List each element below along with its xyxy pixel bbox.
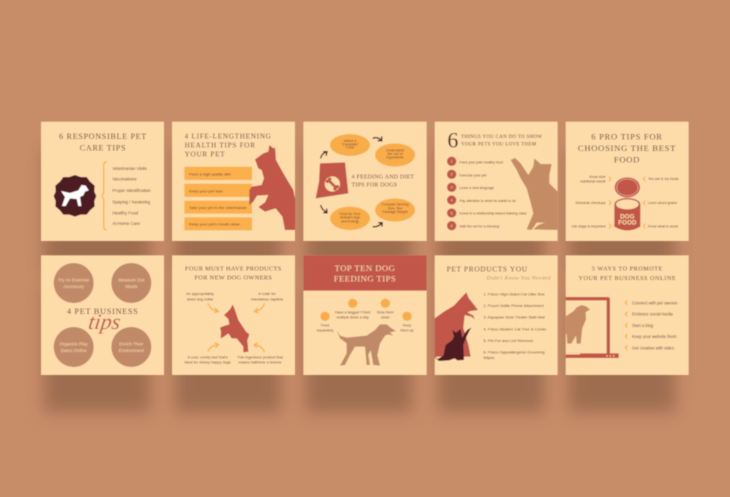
product labels: ideal for chewy happy dogs <box>184 361 231 365</box>
panel: 4 feeding and diet tips <box>303 122 427 241</box>
numbered tips: Have a beggar? Feed <box>335 311 370 315</box>
ellipses with tips: Understand <box>386 149 404 153</box>
product list <box>483 292 547 360</box>
list of care tips: Healthy Food <box>112 210 139 215</box>
panel: pet products you need <box>434 255 558 375</box>
circles with tips: Accessory <box>63 284 85 289</box>
numbered tips <box>317 299 414 333</box>
tip labels: Learn about grains <box>648 201 677 205</box>
big numeral and heading: YOUR PETS YOU LOVE THEM <box>461 142 537 147</box>
list of care tips: Veterinarian Visits <box>112 166 147 171</box>
ellipses with tips: Package Weight <box>382 210 408 214</box>
ellipses with tips: "Complete" <box>341 142 359 146</box>
icon: dog food can: FOOD <box>618 220 637 227</box>
ellipses with tips: Compare Serving <box>381 203 409 207</box>
heading: 5 WAYS TO PROMOTE <box>592 266 663 272</box>
icon: dog food can: DOG <box>620 214 635 221</box>
heading: 4 LIFE-LENGTHENING <box>185 133 272 141</box>
product list: Wipes <box>483 355 494 360</box>
list of ways: Get creative with video <box>632 345 675 350</box>
circles with tips: Try An Exercise <box>58 278 90 283</box>
product labels <box>184 292 284 365</box>
list of care tips: Vaccinations <box>112 177 137 182</box>
ellipses with tips: Ingredients <box>386 155 404 159</box>
icon: dog badge <box>54 175 96 217</box>
heading: YOUR PET BUSINESS ONLINE <box>578 276 676 282</box>
numbered list: Pay attention to what he wants to do <box>459 199 516 203</box>
tip labels: Yes wet & dry foods <box>648 177 679 181</box>
circles with tips: Dates Online <box>61 348 87 353</box>
circles with tips <box>54 263 151 367</box>
icon: standing dog <box>249 145 295 230</box>
panel: 6 pro tips for choosing food <box>566 122 689 241</box>
list of ways: Start a blog <box>632 323 654 328</box>
numbered list: 2 <box>451 173 453 177</box>
numbered list: Visit the vet for a checkup <box>459 224 500 228</box>
icon: food bag with bone <box>316 162 348 198</box>
product labels: An appropriately <box>186 292 214 296</box>
heading: TOP TEN DOG <box>335 263 395 273</box>
icon: cat <box>511 158 558 230</box>
list of ways: Keep your website fresh <box>632 334 677 339</box>
tip bars <box>184 167 252 230</box>
numbered list: 1 <box>451 160 453 164</box>
heading <box>185 133 272 158</box>
big numeral and heading <box>447 127 542 152</box>
product labels: makes bathtime a breeze <box>239 361 281 365</box>
heading: PET PRODUCTS YOU <box>447 265 528 274</box>
ellipses with tips: Feed for Your <box>340 212 361 216</box>
arrows <box>321 136 382 227</box>
numbered tips: multiple times a day <box>337 316 369 320</box>
product list: 5. Pet Fur and Lint Remover <box>483 338 534 343</box>
tip bars: Keep your pet lean <box>189 188 223 193</box>
heading: FOR NEW DOG OWNERS <box>194 274 272 281</box>
panel: top ten dog feeding tips <box>303 255 427 375</box>
numbered list: 4 <box>451 198 453 202</box>
numbered tips: separately <box>317 329 334 333</box>
tip labels: Know what to avoid <box>648 224 678 228</box>
product labels: mandatory naptime <box>251 297 283 301</box>
panel: 4 pet business tips <box>41 255 164 375</box>
heading: 6 PRO TIPS FOR <box>591 131 663 141</box>
heading <box>59 132 147 152</box>
ellipses with tips: the List of <box>387 152 403 156</box>
heading: CARE TIPS <box>80 143 126 152</box>
circles with tips: Measure Out <box>118 278 145 283</box>
product list: 3. Aquapaw Slow Treater Bath Mat <box>483 315 546 320</box>
circles with tips: Enrich Their <box>119 342 144 347</box>
heading: 4 FEEDING AND DIET <box>352 175 414 181</box>
icon: laptop with dog <box>566 297 619 358</box>
product list: 4. Frisco Modern Cat Tree & Condo <box>483 326 547 331</box>
product list: 1. Frisco High-Sided Cat Litter Box <box>483 292 545 297</box>
numbered list: Feed your pets healthy food <box>459 161 503 165</box>
list of ways <box>632 300 678 350</box>
heading <box>578 131 676 164</box>
list of care tips <box>112 166 151 226</box>
ellipses with tips: and Energy <box>341 219 359 223</box>
script word: tips: tips <box>87 309 122 334</box>
ellipses with tips: Size, Not <box>388 206 402 210</box>
product list: 2. Pooch Selfie Phone Attachment <box>483 303 545 308</box>
numbered tips: Keep <box>403 324 411 328</box>
tip bars: Keep your pet's mouth clean <box>189 222 240 227</box>
big numeral and heading: THINGS YOU CAN DO TO SHOW <box>461 135 542 140</box>
product labels: A cool, comfy bed that's <box>188 355 228 359</box>
numbered tips: Feed <box>321 324 329 328</box>
numbered tips: them up <box>400 329 414 333</box>
ellipses with tips <box>330 134 415 230</box>
tip bars: Feed a high quality diet <box>189 171 232 176</box>
list of care tips: Spaying / Neutering <box>112 200 151 205</box>
tip labels: Life stage is important <box>572 224 606 228</box>
panel: 6 responsible pet care tips <box>41 122 164 241</box>
list of care tips: At-Home Care <box>112 221 141 226</box>
numbered tips: down <box>381 316 390 320</box>
arrows <box>208 303 264 352</box>
chevrons <box>609 177 645 228</box>
icon: dog food can <box>614 177 640 230</box>
heading <box>334 263 396 283</box>
ellipses with tips: Select a <box>344 139 356 143</box>
icon: dog and cat <box>434 292 478 361</box>
panel: 5 ways to promote <box>566 255 689 375</box>
product list: 6. Frisco Hypoallergenic Grooming <box>483 350 545 355</box>
heading: 6 RESPONSIBLE PET <box>59 132 147 141</box>
heading: Didn't Know You Needed <box>486 276 551 282</box>
heading: CHOOSING THE BEST <box>578 143 676 153</box>
heading <box>447 265 551 282</box>
numbered list: 6 <box>451 224 453 228</box>
heading: FOOD <box>614 154 640 164</box>
heading <box>185 266 282 281</box>
heading: YOUR PET <box>185 150 225 158</box>
tip labels: Know their <box>589 175 606 179</box>
heading: FOUR MUST HAVE PRODUCTS <box>185 266 282 273</box>
heading: 4 PET BUSINESS <box>67 307 138 316</box>
circles with tips: Environment <box>119 348 145 353</box>
panel: four must have products <box>172 255 295 375</box>
product labels: sized dog collar <box>187 297 214 301</box>
ellipses with tips: Animal's Age <box>340 216 360 220</box>
numbered list: Learn a new language <box>459 186 494 190</box>
icon: standing dog <box>220 304 249 352</box>
bracket <box>102 162 107 230</box>
numbered list <box>447 157 527 230</box>
list of care tips: Proper Identification <box>112 188 151 193</box>
circles with tips: Organize Play <box>60 342 89 347</box>
tip bars: Take your pet to the veterinarian <box>189 205 247 210</box>
list of ways: Embrace social media <box>632 312 674 317</box>
ellipses with tips: Food <box>346 146 354 150</box>
heading: FEEDING TIPS <box>334 273 396 283</box>
tip labels: Schedule checkups <box>575 201 606 205</box>
heading <box>352 175 414 188</box>
numbered list: Exercise your pet <box>459 173 487 177</box>
product labels: A crate for <box>258 292 276 296</box>
big numeral and heading: 6 <box>447 127 458 152</box>
circles with tips: Meals <box>125 284 138 289</box>
tip labels: nutritional needs <box>580 179 606 183</box>
numbered list: 3 <box>451 186 453 190</box>
heading: TIPS FOR DOGS <box>352 182 397 188</box>
icon: standing dog <box>337 324 396 366</box>
panel: 4 life-lengthening health tips <box>172 122 295 241</box>
red header band <box>303 255 427 291</box>
tip labels <box>572 175 679 228</box>
numbered list: Invest in a relationship-based training class <box>459 212 527 216</box>
chevrons <box>625 300 627 350</box>
panel: 6 things you can do <box>435 122 558 241</box>
list of ways: Connect with pet owners <box>632 300 678 305</box>
heading: HEALTH TIPS FOR <box>185 141 256 149</box>
numbered tips: Slow them <box>377 311 394 315</box>
product labels: This ingenious product that <box>237 355 284 359</box>
heading <box>578 266 676 282</box>
numbered list: 5 <box>451 211 453 215</box>
